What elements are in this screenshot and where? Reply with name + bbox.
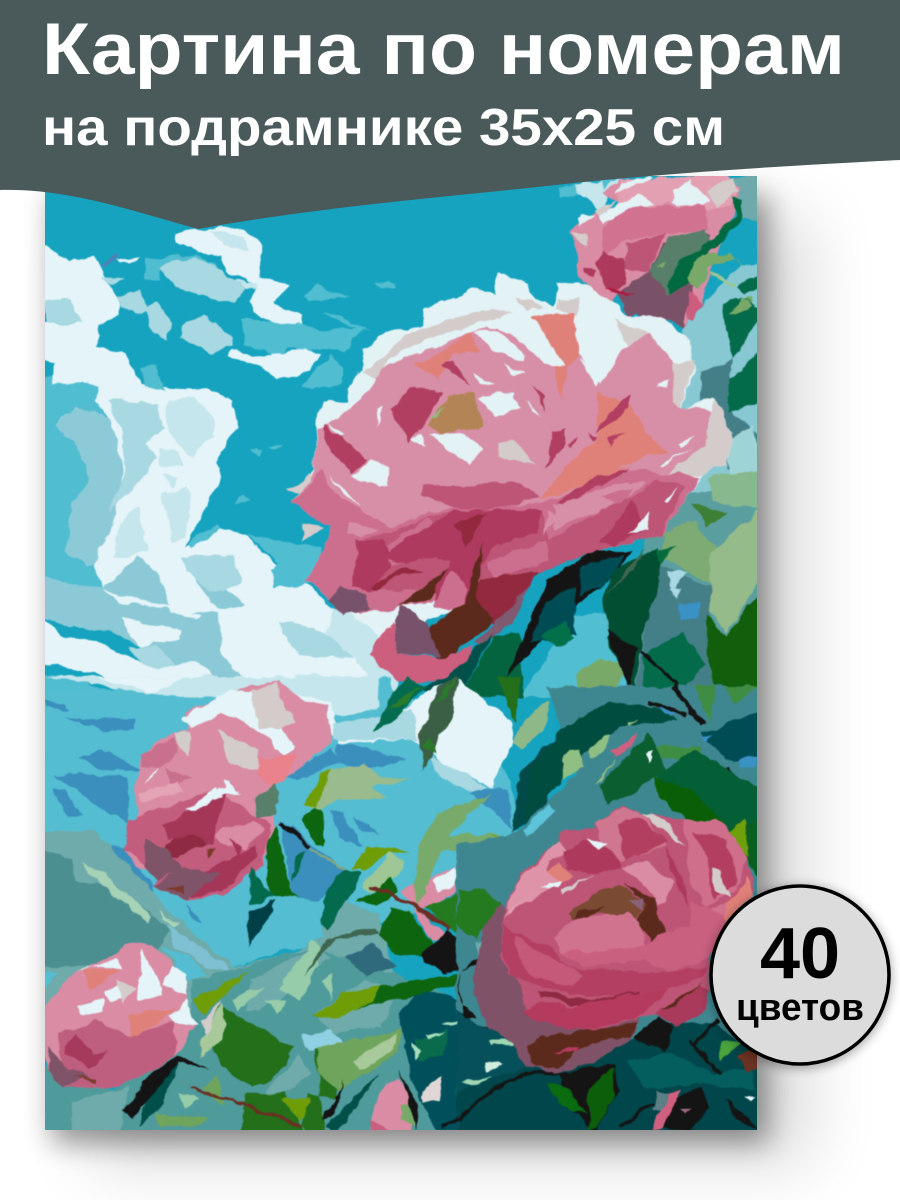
badge: 40 цветов: цветов — [736, 987, 864, 1029]
lower left sky, hills and foliage — [42, 677, 552, 1133]
main peony — [287, 273, 733, 682]
middle branch and leaves — [248, 677, 548, 1018]
subtitle: на подрамнике 35х25 см — [42, 99, 725, 157]
sky — [45, 176, 757, 1090]
badge: 40 цветов: 40 — [760, 914, 840, 994]
title: Картина по номерам — [42, 9, 845, 90]
leaves under main peony — [413, 547, 677, 697]
upper right peony — [560, 173, 767, 337]
painting on canvas — [45, 176, 757, 1130]
clouds upper left — [35, 227, 398, 703]
bottom left peony — [42, 943, 222, 1088]
header banner — [0, 0, 900, 229]
right background foliage — [520, 263, 773, 710]
mid left peony — [125, 680, 330, 900]
badge-side foliage — [717, 1040, 760, 1073]
bottom right peony and foliage — [457, 687, 763, 1133]
badge: 40 цветов — [708, 885, 892, 1069]
canvas shadow — [52, 195, 810, 1165]
